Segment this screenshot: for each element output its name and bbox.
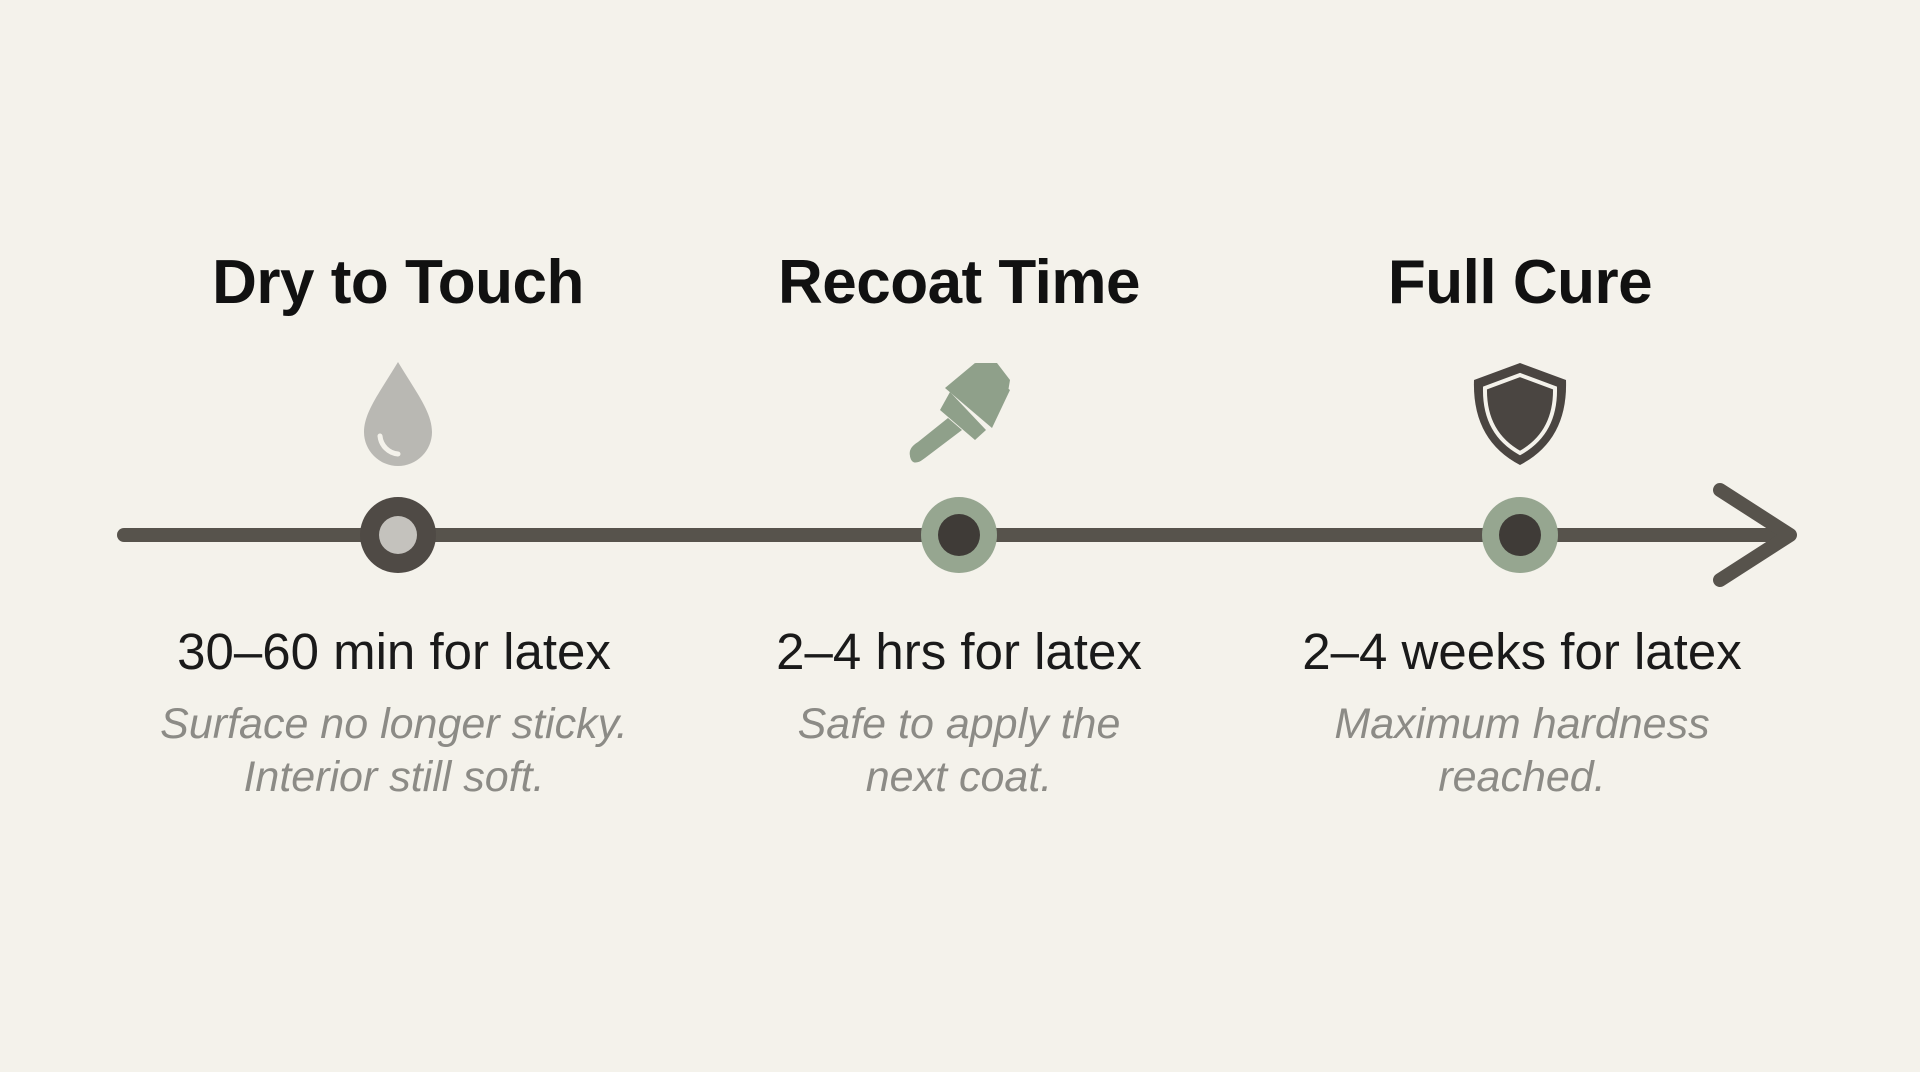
title: Dry to Touch: Dry to Touch — [212, 248, 584, 317]
title: Recoat Time: Recoat Time — [778, 248, 1140, 317]
stat: 2-4 weeks: 2–4 weeks for latex — [1302, 623, 1742, 680]
description 1: Interior still soft. — [243, 753, 545, 801]
title: Full Cure: Full Cure — [1388, 248, 1652, 317]
stat: 2-4 hrs: 2–4 hrs for latex — [776, 623, 1142, 680]
description 2: next coat. — [866, 753, 1052, 801]
marker: full cure — [1482, 497, 1558, 573]
marker: dry to touch — [360, 497, 436, 573]
description 1: Surface no longer sticky. — [160, 700, 628, 748]
icon: water drop — [364, 362, 432, 466]
description 3: reached. — [1438, 753, 1606, 801]
description 3 — [1334, 700, 1710, 801]
description 2 — [798, 700, 1120, 801]
description 3: Maximum hardness — [1334, 700, 1710, 748]
icon: paint brush — [910, 363, 1010, 463]
stat: 30-60 min: 30–60 min for latex — [177, 623, 611, 680]
timeline line with arrow — [124, 490, 1790, 580]
description 1 — [160, 700, 628, 801]
marker: recoat — [921, 497, 997, 573]
icon: shield — [1474, 363, 1566, 465]
description 2: Safe to apply the — [798, 700, 1120, 748]
